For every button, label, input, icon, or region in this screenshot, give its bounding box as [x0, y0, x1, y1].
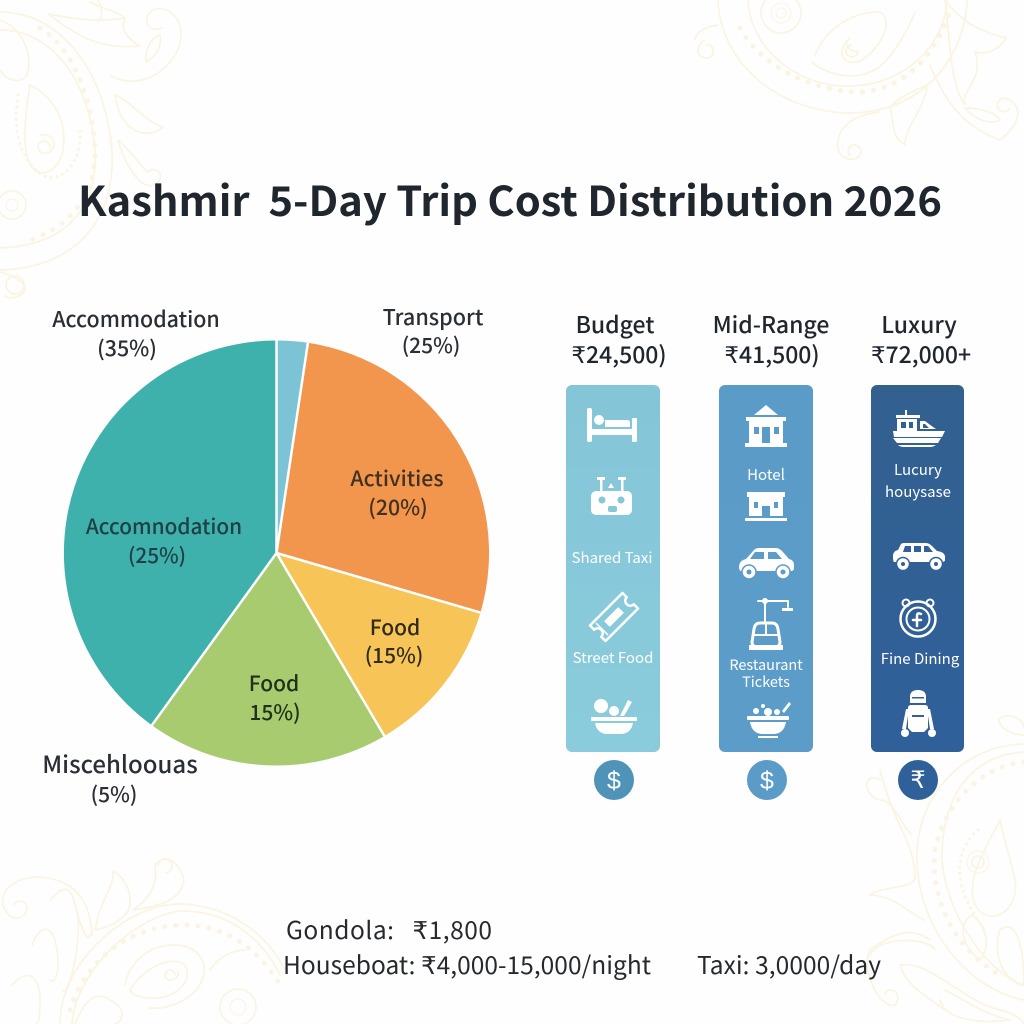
badge: luxury: [898, 760, 938, 800]
footer: gondola price: Gondola: ₹1,800: [286, 912, 492, 947]
label: fine dining: Fine Dining: [881, 648, 960, 669]
icon: food bowl: [591, 699, 637, 734]
panel: luxury: [871, 385, 964, 752]
icon: car: [739, 548, 794, 579]
badge: budget: $: [607, 767, 621, 795]
tier header: mid-range: ₹41,500): [724, 336, 820, 370]
tier header: budget: ₹24,500): [571, 336, 667, 370]
badge: luxury: ₹: [910, 767, 926, 794]
badge: mid-range: [747, 760, 787, 800]
tier header: luxury: Luxury: [881, 306, 957, 340]
slice: orange activities: [276, 343, 489, 613]
footer: houseboat price: Houseboat: ₹4,000-15,000/night: [283, 947, 651, 982]
outer label: accommodation: Accommodation: [52, 303, 220, 334]
outer label: miscellaneous: Miscehloouas: [42, 745, 198, 780]
pie chart: [64, 340, 489, 765]
icon: robot-like taxi: [591, 477, 632, 515]
pie label: activities: Activities: [350, 462, 444, 493]
pie label: food yellow: Food: [370, 612, 420, 642]
slice: yellow food: [276, 553, 480, 736]
outer label: accommodation: (35%): [97, 332, 157, 363]
panel: budget: [566, 385, 660, 752]
pie label: accommodation inner: (25%): [128, 539, 186, 569]
tier header: luxury: ₹72,000+: [871, 336, 971, 370]
label: hotel: Hotel: [747, 464, 785, 485]
label: restaurant tickets: Tickets: [742, 671, 790, 692]
slice: light blue: [276, 340, 308, 553]
outer label: transport: Transport: [383, 301, 484, 332]
icon: bowl: [747, 702, 791, 738]
footer: taxi price: Taxi: 3,0000/day: [697, 947, 881, 982]
pie label: activities: (20%): [368, 491, 428, 522]
label: shared taxi: Shared Taxi: [572, 547, 652, 568]
panel: mid-range: [719, 385, 813, 752]
pie label: food yellow: (15%): [365, 640, 423, 670]
icon: fine dining coin: [900, 600, 936, 636]
icon: ticket: [590, 593, 638, 641]
decorative paisley: bottom right: [867, 716, 1024, 1024]
icon: bed: [587, 408, 637, 442]
pie label: food green: Food: [249, 668, 299, 698]
icon: small hotel: [745, 492, 787, 521]
tier header: mid-range: Mid-Range: [713, 306, 829, 340]
outer label: miscellaneous: (5%): [91, 779, 137, 809]
label: luxury houseboat: houysase: [885, 481, 951, 502]
slice: green food: [152, 553, 384, 765]
icon: suv: [893, 543, 945, 570]
tier header: budget: Budget: [576, 306, 654, 340]
pie label: food green: 15%): [249, 697, 301, 727]
pie label: accommodation inner: Accomnodation: [86, 510, 242, 540]
badge: mid-range: $: [760, 767, 774, 795]
label: luxury houseboat: Lucury: [894, 459, 942, 480]
decorative paisley: top right: [695, 0, 1018, 159]
label: street food: Street Food: [573, 647, 653, 668]
slice: teal accommodation: [64, 340, 277, 725]
decorative paisley: top left: [0, 0, 181, 298]
icon: houseboat: [893, 410, 945, 447]
outer label: transport: (25%): [402, 330, 460, 360]
title: Kashmir 5-Day Trip Cost Distribution 2026: [78, 168, 942, 228]
icon: figure: [901, 690, 936, 737]
decorative paisley: bottom left: [3, 859, 285, 1024]
label: restaurant tickets: Restaurant: [729, 654, 803, 675]
badge: budget: [594, 760, 634, 800]
icon: gondola: [749, 598, 793, 650]
icon: hotel roof building: [745, 405, 787, 447]
